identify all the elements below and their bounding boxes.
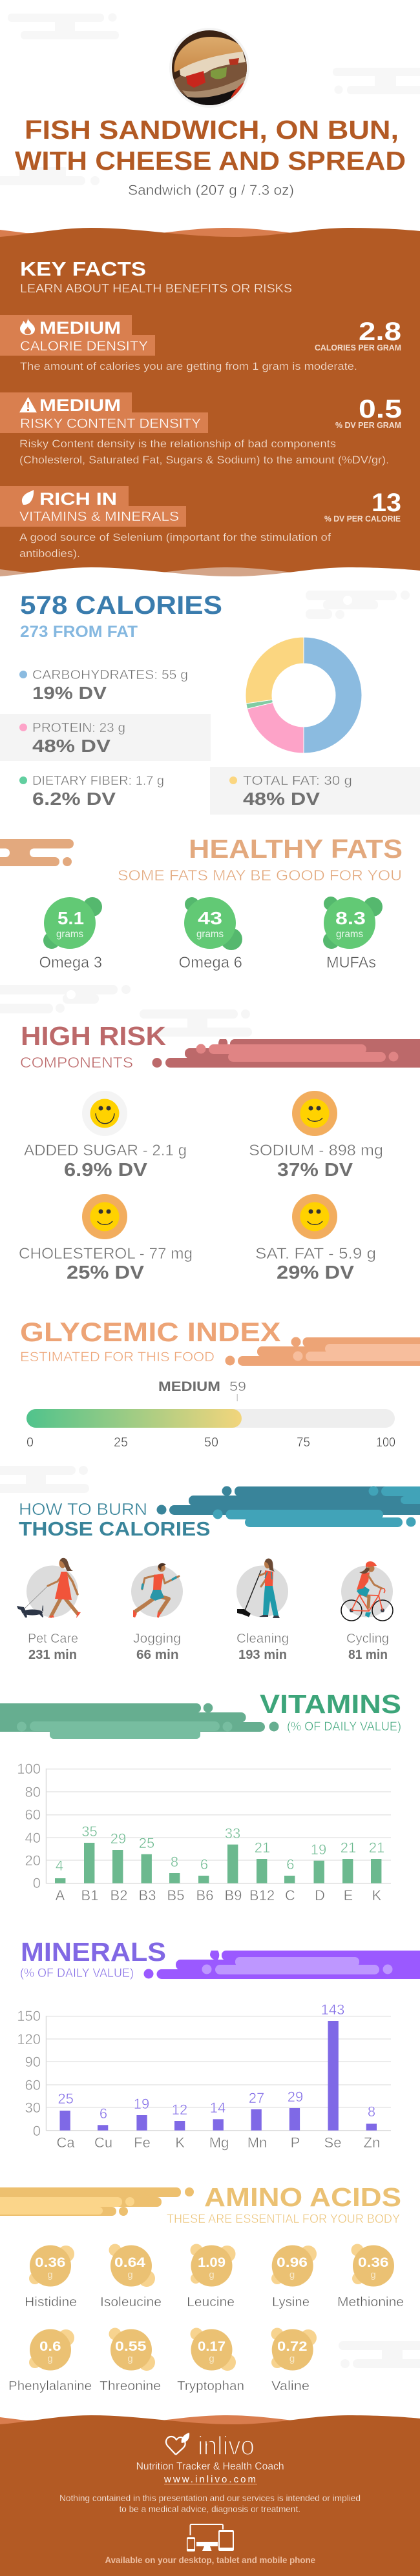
amino: leucine: [187, 2244, 235, 2309]
legend: carbohydrates: 19% DV: [32, 683, 107, 703]
risk item: added sugar: [24, 1091, 187, 1181]
disclaimer: [59, 2493, 361, 2514]
amino: valine: 0.72: [277, 2339, 308, 2354]
bar chart: vitamins: 100: [17, 1761, 41, 1777]
activity: cleaning: [236, 1558, 289, 1662]
amino: leucine: Leucine: [187, 2295, 235, 2309]
bar chart: vitamins: 19: [311, 1841, 326, 1858]
amino: lysine: 0.96: [277, 2255, 308, 2270]
amino: phenylalanine: Phenylalanine: [8, 2379, 92, 2393]
bar chart: vitamins: 6: [286, 1856, 295, 1872]
activity: cycling: 81 min: [348, 1648, 388, 1662]
activity: cycling: [341, 1561, 393, 1662]
decor: burn streak: [156, 1486, 420, 1527]
bar chart: vitamins: 8: [171, 1854, 178, 1870]
minerals heading: [20, 1937, 166, 1980]
bar chart: minerals: Mn: [247, 2135, 267, 2151]
amino: isoleucine: 0.64: [114, 2255, 145, 2270]
glycemic gauge: 25: [114, 1435, 128, 1450]
risk item: saturated fat: 29% DV: [277, 1263, 355, 1283]
amino: threonine: Threonine: [100, 2379, 161, 2393]
amino: valine: g: [289, 2353, 295, 2364]
bar chart: minerals: Fe: [134, 2135, 151, 2151]
decor: amino acids streak: [0, 2187, 194, 2216]
bar chart: minerals: 25: [58, 2091, 74, 2107]
amino: valine: Valine: [271, 2379, 310, 2393]
fat badge: omega 6: grams: [196, 929, 224, 940]
donut chart: macronutrients: [246, 637, 362, 753]
bar chart: minerals: 14: [210, 2100, 226, 2116]
bar chart: vitamins: 21: [255, 1840, 270, 1856]
bar chart: vitamins: 40: [25, 1830, 41, 1846]
bar chart: vitamins: 20: [25, 1852, 41, 1869]
calories heading: [20, 591, 222, 641]
fat badge: MUFAs: grams: [336, 929, 363, 940]
vitamins heading: (% OF DAILY VALUE): [287, 1720, 401, 1734]
fat badge: MUFAs: 8.3: [335, 908, 366, 928]
fact: risky content density: 0.5: [359, 395, 402, 423]
bar chart: vitamins: 25: [139, 1835, 154, 1851]
amino: tryptophan: Tryptophan: [177, 2379, 244, 2393]
bar chart: vitamins: B9: [225, 1887, 242, 1903]
legend: dietary fiber: 6.2% DV: [32, 789, 116, 809]
amino: tryptophan: [177, 2328, 244, 2393]
bar chart: vitamins: D: [315, 1887, 325, 1903]
bar chart: minerals: 6: [100, 2105, 107, 2122]
key facts heading: [20, 258, 292, 295]
bar chart: minerals: 30: [25, 2100, 41, 2116]
amino: phenylalanine: g: [47, 2353, 53, 2364]
fact: risky content density: Risky Content density is the relationship of bad components: [19, 438, 336, 450]
amino: tryptophan: g: [209, 2353, 215, 2364]
icon: devices: [187, 2524, 234, 2551]
fact: calorie density: CALORIES PER GRAM: [315, 343, 401, 352]
calories heading: 578 CALORIES: [20, 591, 222, 620]
bar chart: vitamins: A: [56, 1887, 65, 1903]
risk item: saturated fat: SAT. FAT - 5.9 g: [255, 1245, 376, 1263]
fact: risky content density: [0, 392, 402, 466]
high risk heading: [20, 1021, 166, 1071]
disclaimer: Nothing contained in this presentation and our services is intended or implied: [59, 2493, 361, 2503]
fact: calorie density: MEDIUM: [39, 318, 121, 338]
bar chart: vitamins: 35: [81, 1823, 98, 1840]
decor: burn background streak: [0, 1466, 89, 1493]
bar chart: minerals: Ca: [57, 2135, 75, 2151]
glycemic gauge: 75: [297, 1435, 310, 1450]
risk item: sodium: SODIUM - 898 mg: [249, 1142, 383, 1159]
risk item: cholesterol: 25% DV: [67, 1263, 145, 1283]
bar chart: vitamins: K: [372, 1887, 382, 1903]
title: [15, 115, 406, 176]
amino: lysine: g: [289, 2269, 295, 2280]
amino: methionine: [337, 2244, 404, 2309]
bar chart: minerals: Zn: [364, 2135, 380, 2151]
risk item: cholesterol: [19, 1194, 193, 1283]
risk item: cholesterol: CHOLESTEROL - 77 mg: [19, 1245, 193, 1263]
bar chart: vitamins: 80: [25, 1784, 41, 1800]
bar chart: minerals: 143: [321, 2002, 344, 2018]
bar chart: minerals: 150: [17, 2008, 41, 2024]
amino: lysine: Lysine: [272, 2295, 310, 2309]
bar chart: vitamins: 33: [225, 1825, 240, 1841]
footer url: www.inlivo.com: [163, 2474, 256, 2485]
bar chart: vitamins: C: [285, 1887, 295, 1903]
decor: amino background streak: [339, 2341, 420, 2368]
bar chart: vitamins: 4: [56, 1858, 63, 1874]
bar chart: minerals: Cu: [94, 2135, 112, 2151]
bar chart: minerals: 0: [33, 2123, 41, 2139]
calories heading: 273 FROM FAT: [20, 623, 138, 641]
fat badge: omega 3: grams: [56, 929, 83, 940]
amino: phenylalanine: 0.6: [39, 2339, 61, 2354]
legend: protein: [0, 714, 211, 761]
legend: protein: 48% DV: [32, 736, 110, 756]
amino acids heading: THESE ARE ESSENTIAL FOR YOUR BODY: [167, 2213, 400, 2226]
legend: dietary fiber: [19, 774, 164, 809]
key facts heading: KEY FACTS: [20, 258, 146, 280]
risk item: sodium: 37% DV: [277, 1160, 353, 1181]
decor: glycemic streak: [225, 1337, 420, 1366]
healthy fats heading: SOME FATS MAY BE GOOD FOR YOU: [118, 867, 402, 884]
decor: vitamins streak: [0, 1703, 279, 1739]
bar chart: vitamins: B1: [81, 1887, 98, 1903]
healthy fats heading: [118, 834, 403, 884]
fat badge: omega 3: [39, 897, 102, 971]
glycemic gauge: 0: [26, 1435, 34, 1450]
title: WITH CHEESE AND SPREAD: [15, 146, 406, 176]
bar chart: minerals: 120: [17, 2031, 41, 2047]
glycemic gauge: 50: [204, 1435, 218, 1450]
disclaimer: to be a medical advice, diagnosis or treatment.: [119, 2504, 300, 2514]
fact: risky content density: RISKY CONTENT DENSITY: [20, 416, 201, 431]
amino: leucine: g: [209, 2269, 215, 2280]
bar chart: minerals: 19: [134, 2096, 149, 2112]
bar chart: vitamins: 21: [341, 1840, 356, 1856]
activity: jogging: 66 min: [136, 1648, 178, 1662]
bar chart: vitamins: 21: [369, 1840, 384, 1856]
vitamins heading: VITAMINS: [260, 1689, 401, 1719]
decor: healthy fats streak: [0, 839, 81, 866]
bar chart: minerals: 12: [172, 2102, 187, 2118]
bar chart: vitamins: 6: [200, 1856, 208, 1872]
burn heading: THOSE CALORIES: [19, 1517, 211, 1540]
fact: calorie density: 2.8: [359, 318, 401, 346]
fat badge: MUFAs: MUFAs: [326, 954, 376, 971]
fact: calorie density: The amount of calories you are getting from 1 gram is moderate.: [20, 361, 357, 372]
amino: isoleucine: g: [127, 2269, 133, 2280]
fact: rich in vitamins and minerals: % DV PER CALORIE: [324, 514, 401, 523]
minerals heading: (% OF DAILY VALUE): [20, 1967, 134, 1980]
bar chart: vitamins: B12: [249, 1887, 275, 1903]
amino: methionine: g: [370, 2269, 376, 2280]
fact: calorie density: CALORIE DENSITY: [20, 339, 148, 354]
high risk heading: COMPONENTS: [20, 1054, 133, 1071]
burn heading: [19, 1499, 211, 1540]
amino: histidine: 0.36: [35, 2255, 66, 2270]
glycemic index heading: [20, 1317, 280, 1364]
logo: inlivo: inlivo: [198, 2431, 255, 2460]
amino: methionine: 0.36: [358, 2255, 389, 2270]
glycemic gauge: 59: [229, 1379, 246, 1394]
decor: top background streaks: [0, 13, 420, 185]
fact: rich in vitamins and minerals: antibodies).: [19, 548, 80, 560]
fact: risky content density: % DV PER GRAM: [335, 421, 401, 430]
risk item: added sugar: 6.9% DV: [64, 1160, 148, 1181]
legend: protein: PROTEIN: 23 g: [32, 721, 125, 735]
legend: carbohydrates: [19, 668, 188, 703]
bar chart: minerals: 90: [25, 2054, 41, 2070]
fact: rich in vitamins and minerals: VITAMINS & MINERALS: [19, 509, 179, 524]
amino: threonine: g: [127, 2353, 133, 2364]
fact: rich in vitamins and minerals: RICH IN: [39, 489, 117, 509]
decor: high risk streak: [152, 1039, 420, 1068]
decor: minerals streak: [143, 1951, 420, 1979]
bar chart: vitamins: 0: [33, 1875, 41, 1891]
fact: rich in vitamins and minerals: A good source of Selenium (important for the stimulation of: [19, 532, 331, 543]
glycemic gauge: [26, 1379, 395, 1450]
fat badge: MUFAs: [323, 897, 383, 971]
fat badge: omega 3: 5.1: [58, 908, 84, 928]
amino: histidine: [25, 2245, 77, 2309]
legend: total fat: [210, 767, 420, 815]
bar chart: minerals: Se: [324, 2135, 341, 2151]
availability note: Available on your desktop, tablet and mobile phone: [105, 2555, 315, 2565]
amino: histidine: Histidine: [25, 2295, 77, 2309]
serving size: Sandwich (207 g / 7.3 oz): [128, 182, 294, 198]
risk item: added sugar: ADDED SUGAR - 2.1 g: [24, 1142, 187, 1159]
amino: phenylalanine: [8, 2329, 92, 2393]
fact: calorie density: [0, 315, 401, 372]
glycemic gauge: MEDIUM: [158, 1379, 220, 1394]
amino: lysine: [271, 2245, 317, 2309]
amino acids heading: [167, 2182, 401, 2226]
bar chart: vitamins: B3: [139, 1887, 156, 1903]
activity: pet care: Pet Care: [28, 1632, 78, 1646]
bar chart: minerals: 29: [288, 2089, 303, 2105]
fat badge: omega 6: 43: [198, 908, 222, 928]
fact: risky content density: (Cholesterol, Saturated Fat, Sugars & Sodium) to the amount (%DV/gr).: [19, 454, 389, 466]
amino acids heading: AMINO ACIDS: [204, 2182, 401, 2212]
bar chart: minerals: 27: [249, 2090, 264, 2106]
fat badge: omega 6: [178, 897, 242, 971]
legend: dietary fiber: DIETARY FIBER: 1.7 g: [32, 774, 164, 788]
bar chart: vitamins: B2: [110, 1887, 127, 1903]
amino: isoleucine: [100, 2244, 162, 2309]
fat badge: omega 3: Omega 3: [39, 954, 102, 971]
activity: cycling: Cycling: [346, 1632, 389, 1646]
minerals heading: MINERALS: [21, 1937, 166, 1967]
amino: histidine: g: [47, 2269, 53, 2280]
bar chart: vitamins: [17, 1761, 391, 1903]
icon: warning triangle: [19, 397, 37, 412]
bar chart: minerals: K: [175, 2135, 185, 2151]
legend: total fat: TOTAL FAT: 30 g: [243, 774, 352, 788]
glycemic index heading: GLYCEMIC INDEX: [20, 1317, 280, 1347]
fact: rich in vitamins and minerals: [0, 486, 401, 560]
amino: threonine: [100, 2328, 161, 2393]
vitamins heading: [260, 1689, 401, 1734]
bar chart: minerals: P: [291, 2135, 300, 2151]
amino: isoleucine: Isoleucine: [100, 2295, 162, 2309]
amino: tryptophan: 0.17: [198, 2339, 226, 2354]
food photo: [168, 26, 252, 110]
bar chart: vitamins: E: [344, 1887, 353, 1903]
healthy fats heading: HEALTHY FATS: [189, 834, 403, 864]
amino: threonine: 0.55: [115, 2339, 147, 2354]
amino: methionine: Methionine: [337, 2295, 404, 2309]
glycemic gauge: 100: [376, 1435, 395, 1450]
bar chart: vitamins: B6: [196, 1887, 213, 1903]
title: FISH SANDWICH, ON BUN,: [25, 115, 399, 145]
activity: jogging: [131, 1563, 183, 1662]
activity: pet care: [17, 1558, 81, 1662]
legend: carbohydrates: CARBOHYDRATES: 55 g: [32, 668, 188, 682]
bar chart: minerals: [17, 2002, 391, 2151]
fact: risky content density: MEDIUM: [39, 396, 121, 415]
icon: flame: [20, 318, 35, 335]
bar chart: minerals: Mg: [209, 2135, 229, 2151]
burn heading: HOW TO BURN: [19, 1499, 147, 1519]
icon: leaf: [22, 490, 34, 505]
bar chart: vitamins: 60: [25, 1807, 41, 1823]
activity: cleaning: 193 min: [238, 1648, 287, 1662]
activity: cleaning: Cleaning: [236, 1632, 289, 1646]
risk item: saturated fat: [255, 1194, 376, 1283]
key facts heading: LEARN ABOUT HEALTH BENEFITS OR RISKS: [20, 281, 292, 295]
activity: jogging: Jogging: [133, 1632, 181, 1646]
glycemic index heading: ESTIMATED FOR THIS FOOD: [20, 1349, 215, 1364]
decor: calories streaks: [306, 591, 410, 619]
footer tagline: Nutrition Tracker & Health Coach: [136, 2461, 284, 2472]
high risk heading: HIGH RISK: [21, 1021, 166, 1051]
legend: total fat: 48% DV: [243, 789, 320, 809]
panel: key facts: [0, 228, 420, 598]
bar chart: vitamins: 29: [110, 1831, 126, 1847]
bar chart: minerals: 60: [25, 2077, 41, 2093]
amino: leucine: 1.09: [198, 2255, 226, 2270]
amino: valine: [271, 2328, 317, 2393]
bar chart: vitamins: B5: [167, 1887, 184, 1903]
panel: footer: [0, 2415, 420, 2576]
logo: inlivo: [166, 2431, 255, 2460]
bar chart: minerals: 8: [368, 2104, 375, 2120]
risk item: sodium: [249, 1091, 383, 1181]
fact: rich in vitamins and minerals: 13: [372, 489, 401, 517]
fat badge: omega 6: Omega 6: [178, 954, 242, 971]
activity: pet care: 231 min: [28, 1648, 77, 1662]
decor: high risk background streaks: [0, 985, 252, 1037]
